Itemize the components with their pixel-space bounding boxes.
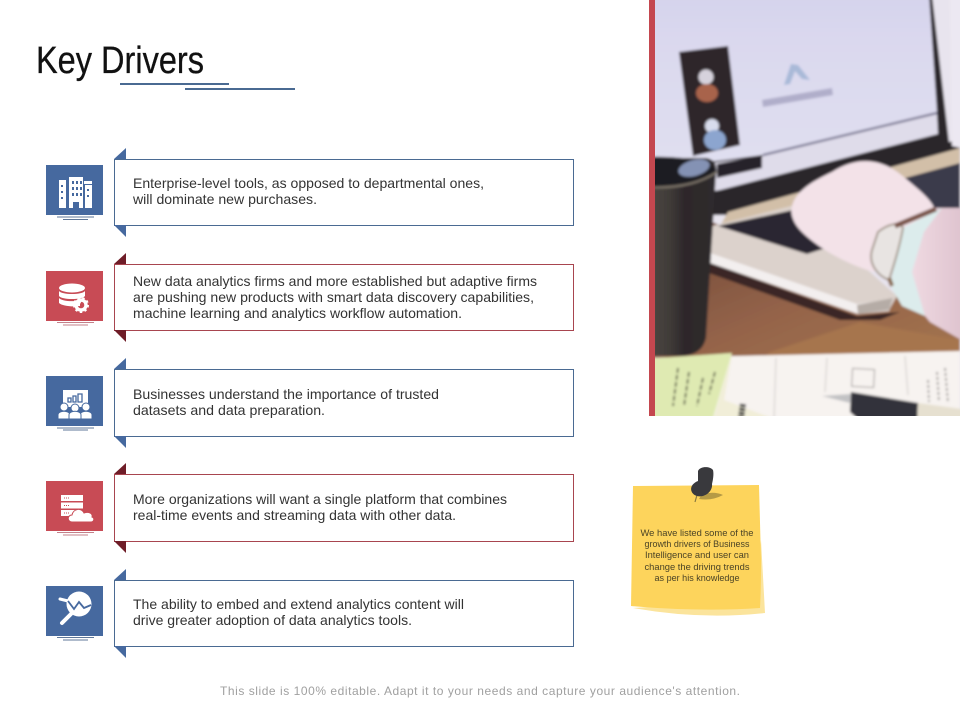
panel: driver 2: machine learning and analytics workflow automation. bbox=[133, 305, 462, 321]
accent bar bbox=[649, 0, 655, 416]
icon: servers and cloud bbox=[46, 481, 103, 535]
text box bbox=[114, 474, 574, 542]
laptop lid bbox=[711, 0, 960, 217]
icon: magnifier with trend line bbox=[46, 586, 103, 640]
panel: driver 1 bbox=[46, 148, 574, 237]
pen bbox=[822, 394, 851, 403]
note text: growth drivers of Business bbox=[644, 539, 750, 550]
panel: driver 5: The ability to embed and extend analytics content will bbox=[133, 596, 464, 612]
panel: driver 5: drive greater adoption of data analytics tools. bbox=[133, 612, 412, 628]
panel: driver 3: datasets and data preparation. bbox=[133, 402, 325, 418]
panel: driver 4: real-time events and streaming data with other data. bbox=[133, 507, 456, 523]
screen content bbox=[679, 46, 740, 156]
note text: Intelligence and user can bbox=[645, 550, 749, 561]
note text: as per his knowledge bbox=[654, 573, 740, 584]
hinge band and keyboard bbox=[720, 148, 960, 226]
panel: driver 2: New data analytics firms and more established but adaptive firms bbox=[133, 273, 537, 289]
hand and sleeve bbox=[791, 161, 935, 272]
icon: push pin bbox=[691, 467, 723, 502]
desk wood bbox=[645, 222, 960, 360]
photo: laptop, mug and notes on a desk bbox=[645, 0, 960, 425]
panel: driver 4: More organizations will want a single platform that combines bbox=[133, 491, 507, 507]
text box bbox=[114, 160, 574, 226]
text box bbox=[114, 264, 574, 330]
icon: team with chart bbox=[46, 376, 103, 430]
note text bbox=[640, 528, 754, 584]
panel: driver 2 bbox=[46, 253, 574, 342]
icon: office buildings bbox=[46, 165, 103, 220]
text box bbox=[114, 370, 574, 436]
title underline bbox=[120, 84, 295, 89]
icon: database with gear bbox=[46, 271, 103, 325]
paper bbox=[655, 348, 960, 416]
note text: We have listed some of the bbox=[640, 528, 754, 539]
footer note: This slide is 100% editable. Adapt it to your needs and capture your audience's attention. bbox=[220, 684, 740, 698]
text box bbox=[114, 580, 574, 646]
mug bbox=[645, 158, 716, 356]
panel: driver 2: are pushing new products with smart data discovery capabilities, bbox=[133, 289, 534, 305]
panel: driver 3: Businesses understand the importance of trusted bbox=[133, 386, 439, 402]
laptop base bbox=[710, 205, 897, 313]
panel: driver 3 bbox=[46, 358, 574, 448]
note text: change the driving trends bbox=[644, 562, 750, 573]
title: Key Drivers bbox=[36, 40, 204, 82]
panel: driver 5 bbox=[46, 569, 574, 658]
panel: driver 1: Enterprise-level tools, as opposed to departmental ones, bbox=[133, 175, 484, 191]
sticky note bbox=[631, 467, 765, 616]
panel: driver 4 bbox=[46, 463, 574, 553]
panel: driver 1: will dominate new purchases. bbox=[132, 191, 317, 207]
